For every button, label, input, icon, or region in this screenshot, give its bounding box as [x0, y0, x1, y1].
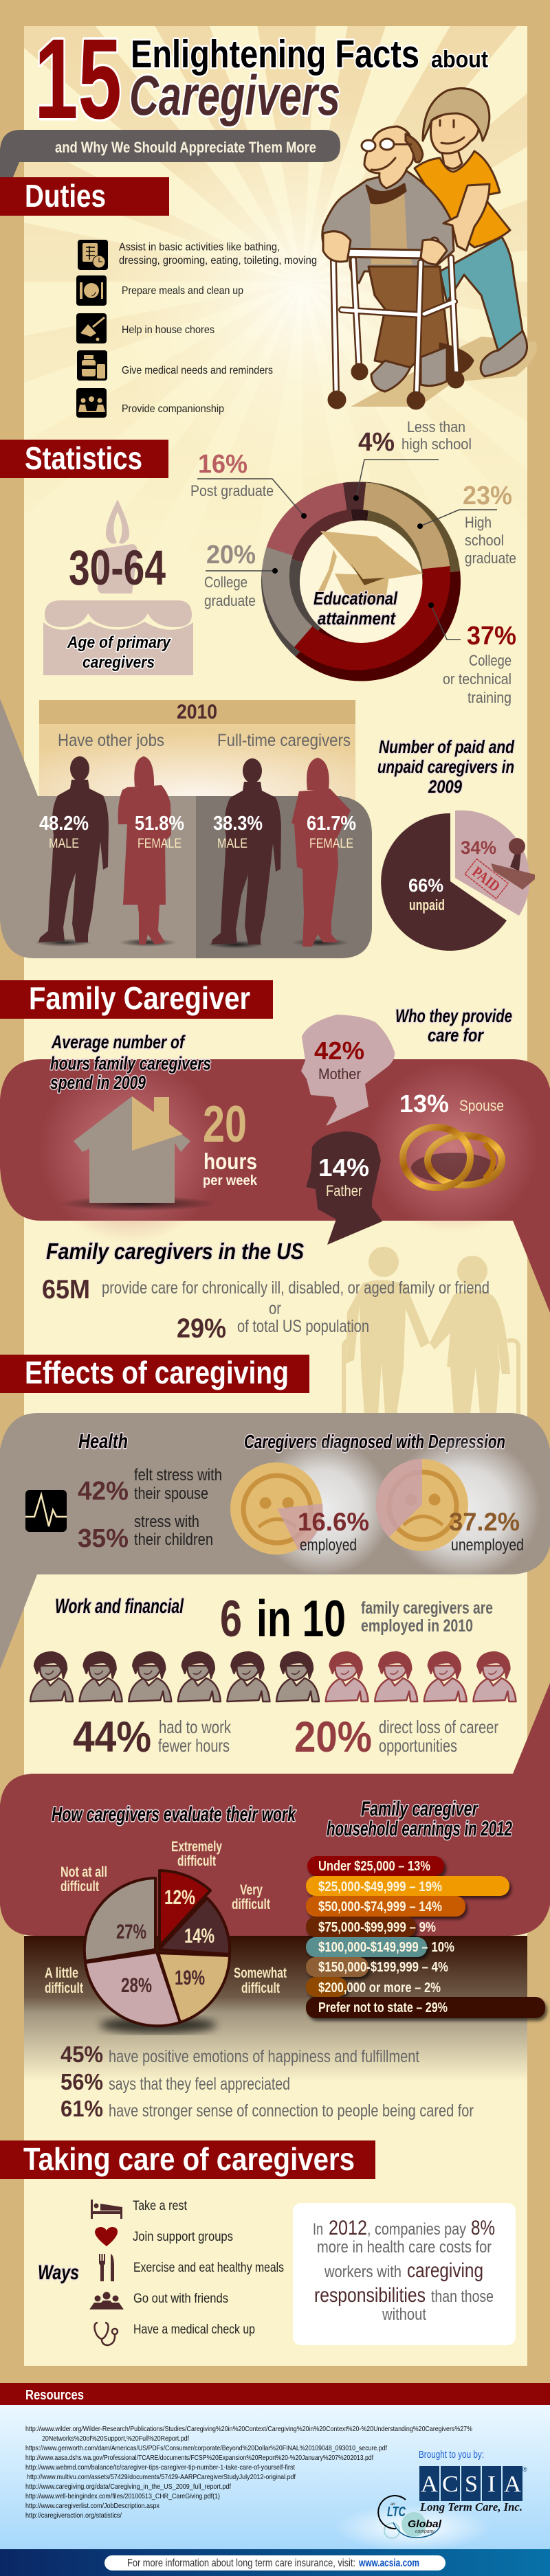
- callout: health care costs: In: [313, 2220, 323, 2239]
- pie category labels: difficult: [45, 1980, 83, 1996]
- panel: evaluation and earnings: [0, 1683, 550, 2033]
- icon: paid stamp: [465, 838, 535, 899]
- stat: employed: [298, 1508, 369, 1555]
- pie values: 27%: [116, 1921, 146, 1943]
- pie category labels: [45, 1839, 287, 1996]
- stat: 45 percent: have positive emotions of happiness and fulfillment: [109, 2047, 419, 2066]
- stat: career loss: 20%: [294, 1713, 372, 1761]
- heading: who they provide care for: care for: [428, 1025, 484, 1046]
- stat: unemployed: 37.2%: [449, 1508, 520, 1536]
- stat: 6 in 10: 6: [220, 1590, 242, 1647]
- pie category labels: Not at all: [60, 1864, 107, 1880]
- duty text two: Prepare meals and clean up: [122, 285, 243, 297]
- chart: how caregivers evaluate pie: [85, 1871, 230, 2033]
- cake caption: [67, 633, 171, 672]
- duty text four: Give medical needs and reminders: [122, 365, 273, 376]
- icon: paid stamp: PAID: [469, 863, 503, 895]
- heading: household earnings: [327, 1798, 512, 1840]
- chart: household earnings bars: $200,000 or more – 2%: [318, 1980, 441, 1996]
- pie category labels: difficult: [232, 1897, 270, 1912]
- stat: 65 million: [42, 1275, 490, 1304]
- label 37 percent: College: [469, 652, 512, 669]
- logo: acsia: I: [487, 2472, 496, 2497]
- stat: fewer hours: [73, 1713, 232, 1761]
- illustration: caregiver helping elderly man with walker: [322, 89, 537, 409]
- logo: acsia: A: [504, 2472, 521, 2497]
- source links: http://www.well-beingindex.com/files/20100513_CHR_CareGiving.pdf(1): [25, 2492, 220, 2500]
- chart: educational attainment donut: [243, 462, 474, 695]
- title: [34, 16, 488, 143]
- source links: [25, 2425, 472, 2520]
- panel: paid and unpaid caregivers: [377, 736, 535, 951]
- stat: unemployed: unemployed: [451, 1536, 524, 1555]
- label 23 percent: graduate: [465, 550, 516, 567]
- stat: stress with children: [78, 1513, 213, 1553]
- label 37 percent: 37%: [467, 622, 516, 651]
- title caregivers: Caregivers: [129, 65, 340, 127]
- logo: acsia: C: [442, 2472, 459, 2497]
- silhouette: father: 14%: [318, 1153, 369, 1182]
- heading: resources: [0, 2383, 550, 2405]
- logo: acsia: ®: [522, 2466, 527, 2473]
- label 4 percent: Less than: [407, 418, 465, 436]
- chart: household earnings bars: $75,000-$99,999 – 9%: [318, 1920, 436, 1935]
- source links: http://www.caregiving.org/data/Caregiving_in_the_US_2009_full_report.pdf: [25, 2483, 231, 2491]
- logo: ltc global: an: [390, 2502, 395, 2507]
- logo: acsia: Long Term Care, Inc.: [419, 2500, 522, 2513]
- panel heading: hours: Average number of: [51, 1032, 186, 1052]
- label 16 percent: [190, 450, 274, 499]
- stat: 56 percent: says that they feel appreciated: [109, 2075, 290, 2094]
- callout: health care costs: than those: [431, 2287, 494, 2306]
- gradient backdrop: [24, 1936, 527, 2081]
- label 23 percent: 23%: [463, 482, 512, 510]
- heading: effects of caregiving: Effects of caregiving: [25, 1355, 289, 1390]
- callout: health care costs: caregiving: [407, 2259, 483, 2282]
- icon: medicine: [77, 350, 107, 381]
- logo: ltc global: LTC: [387, 2505, 406, 2520]
- stat: 45 percent: 45%: [60, 2042, 103, 2067]
- way text: friends: Go out with friends: [133, 2292, 228, 2306]
- column headings: Have other jobs: [58, 731, 164, 750]
- donut title: attainment: [318, 608, 396, 629]
- silhouette: mother: 42%: [314, 1037, 364, 1065]
- panel heading: unpaid caregivers in: [377, 756, 514, 777]
- heading: duties: [0, 177, 169, 216]
- gender labels: FEMALE: [138, 837, 182, 851]
- label 37 percent: [443, 622, 516, 706]
- subtitle banner: and Why We Should Appreciate Them More: [55, 139, 316, 156]
- logo: ltc global: [378, 2496, 442, 2538]
- panel heading: hours: spend in 2009: [50, 1072, 146, 1093]
- panel: work and financial: [30, 1590, 516, 1761]
- heading: work and financial: Work and financial: [55, 1595, 184, 1618]
- panel heading: hours: hours family caregivers: [50, 1053, 211, 1074]
- label 16 percent: 16%: [198, 450, 248, 479]
- label 16 percent: Post graduate: [190, 482, 274, 499]
- label 4 percent: 4%: [358, 428, 395, 457]
- heading: statistics: Statistics: [25, 440, 142, 476]
- panel: family caregivers in the us: [42, 1239, 490, 1344]
- gender labels: MALE: [217, 837, 248, 851]
- duty text one: [119, 242, 317, 267]
- stat: career loss: direct loss of career: [379, 1717, 498, 1737]
- way text: support: Join support groups: [133, 2230, 233, 2244]
- icon: bed: [91, 2200, 122, 2219]
- chart: household earnings bars: $25,000-$49,999 – 19%: [318, 1879, 442, 1895]
- callout: health care costs: without: [382, 2305, 426, 2324]
- stat: 29 percent: 29%: [177, 1313, 226, 1344]
- logo: acsia: [419, 2466, 527, 2513]
- panel: ways to cope: [38, 2199, 284, 2345]
- icon: broom: [76, 313, 107, 343]
- pie category labels: Very: [240, 1882, 263, 1898]
- source links: 20Networks%20of%20Support,%20Full%20Report.pdf: [42, 2434, 189, 2443]
- chart: household earnings bars: [306, 1856, 545, 2018]
- label 20 percent: 20%: [206, 541, 256, 569]
- logo: ltc global: Global: [408, 2518, 442, 2530]
- stat: 6 in 10: in 10: [256, 1590, 346, 1647]
- label 4 percent: high school: [402, 436, 472, 453]
- cake caption: Age of primary: [67, 633, 171, 652]
- heading: resources: Resources: [25, 2388, 84, 2403]
- panel: health and depression: [0, 1413, 550, 1669]
- source links: http://www.wilder.org/Wilder-Research/Publications/Studies/Caregiving%20in%20Context/Caregiving%20in%20Context%20-%20Understanding%20Caregivers%27%: [25, 2425, 472, 2433]
- stat: 56 percent: [60, 2069, 290, 2094]
- stat: stress with spouse: [78, 1466, 222, 1506]
- panel: age of primary caregivers cake: [43, 499, 193, 675]
- label 20 percent: graduate: [204, 592, 256, 609]
- age range number: 30-64: [69, 541, 166, 596]
- label 23 percent: [463, 482, 516, 567]
- donut labels: [190, 418, 516, 706]
- icon: stethoscope: [95, 2323, 118, 2345]
- column headings: Full-time caregivers: [217, 731, 351, 750]
- pie values: [116, 1886, 214, 1997]
- heading: evaluate work: How caregivers evaluate their work: [52, 1803, 296, 1826]
- pie values: 12%: [164, 1886, 195, 1909]
- panel: family caregiver hours and recipients: [0, 1006, 550, 1313]
- source links: http://www.aasa.dshs.wa.gov/Professional/TCARE/documents/FCSP%20Expansion%20Report%20-%20January%207%202013.pdf: [25, 2454, 373, 2462]
- heading: duties: Duties: [25, 178, 106, 214]
- donut leader lines: [197, 460, 497, 640]
- stat: stress with children: their children: [134, 1530, 213, 1549]
- heading: who they provide care for: [395, 1006, 512, 1046]
- pie values: 19%: [175, 1967, 205, 1989]
- label 37 percent: or technical: [443, 670, 512, 688]
- logo: acsia: A: [421, 2472, 438, 2497]
- stat: hours per week: hours: [204, 1149, 257, 1174]
- stat: 29 percent: of total US population: [237, 1317, 369, 1336]
- text: employed caregivers: [361, 1598, 493, 1636]
- panel heading: Number of paid and: [379, 736, 515, 757]
- stat: spouse: [399, 1089, 504, 1118]
- stat: hours per week: 20: [203, 1095, 247, 1153]
- heading: health: Health: [78, 1430, 128, 1453]
- stat: career loss: opportunities: [379, 1735, 457, 1756]
- silhouette: female full-time: [292, 758, 351, 947]
- label 37 percent: training: [468, 689, 512, 706]
- footer bar: [0, 2549, 550, 2576]
- icon: fork and knife: [99, 2254, 114, 2281]
- pie category labels: Extremely: [171, 1839, 222, 1855]
- icon: heart monitor: [25, 1490, 67, 1532]
- percentages: 61.7%: [307, 813, 356, 835]
- gender labels: FEMALE: [309, 837, 353, 851]
- stat: 56 percent: 56%: [60, 2069, 103, 2094]
- icon: house: [58, 1096, 217, 1211]
- chart: household earnings bars: $100,000-$149,999 – 10%: [318, 1940, 454, 1955]
- title about: about: [431, 47, 488, 73]
- logo: acsia: S: [465, 2472, 478, 2497]
- pie labels: 66%: [408, 875, 443, 896]
- year heading: 2010: [177, 701, 217, 723]
- silhouette: father: Father: [326, 1182, 362, 1199]
- way text: checkup: Have a medical check up: [133, 2323, 255, 2337]
- source links: https://www.genworth.com/dam/Americas/US/PDFs/Consumer/corporate/Beyond%20Dollar%20FINAL%20109048_093010_secure.pdf: [25, 2444, 387, 2452]
- stat: employed: 16.6%: [298, 1508, 369, 1536]
- stat: career loss: [294, 1713, 498, 1761]
- text: brought to you by: Brought to you by:: [419, 2449, 484, 2461]
- icon: graduation cap: [318, 531, 423, 605]
- stat: fewer hours: 44%: [73, 1713, 151, 1761]
- heading: who they provide care for: Who they provide: [395, 1006, 512, 1026]
- stat: hours per week: per week: [203, 1173, 258, 1188]
- panel: duties list: [76, 240, 317, 418]
- column headings: [58, 731, 351, 750]
- stat: 65 million: 65M: [42, 1275, 90, 1304]
- panel: resources list: [0, 2405, 550, 2551]
- icon: companions: [76, 388, 107, 418]
- panel heading: hours: [50, 1032, 211, 1093]
- source links: http://www.multivu.com/assets/57429/documents/57429-AARPCaregiverStudyJuly2012-original.pdf: [27, 2473, 296, 2481]
- connector: or: or: [269, 1299, 281, 1318]
- pie category labels: Somewhat: [234, 1965, 287, 1981]
- heading: taking care of caregivers: Taking care of caregivers: [23, 2141, 355, 2177]
- callout: health care costs: [293, 2203, 516, 2345]
- percentages: 38.3%: [213, 813, 263, 835]
- stat: spouse: 13%: [399, 1089, 449, 1118]
- label 20 percent: [204, 541, 256, 609]
- icon: friends: [89, 2292, 124, 2309]
- silhouette: mother: Mother: [318, 1065, 361, 1083]
- way text: exercise: Exercise and eat healthy meals: [133, 2261, 284, 2275]
- logo: ltc global: company: [415, 2529, 434, 2534]
- stat: stress with spouse: their spouse: [134, 1484, 208, 1503]
- text: employed caregivers: family caregivers are: [361, 1598, 493, 1618]
- silhouette: father: [306, 1131, 382, 1245]
- pie category labels: difficult: [241, 1980, 280, 1996]
- gender labels: MALE: [49, 837, 79, 851]
- chart: household earnings bars: Prefer not to state – 29%: [318, 2000, 448, 2015]
- label 23 percent: High: [465, 514, 492, 531]
- panel heading: [377, 736, 515, 797]
- donut leader dots: [272, 495, 434, 608]
- panel: 2010 gender breakdown: [0, 699, 372, 958]
- section subheading: Family caregivers in the US: [46, 1239, 304, 1264]
- footer bar: www.acsia.com: [358, 2557, 419, 2569]
- icon: meal: [76, 275, 107, 306]
- pie labels: 34%: [461, 837, 496, 858]
- stat: employed: employed: [300, 1536, 357, 1555]
- chart: household earnings bars: Under $25,000 – 13%: [318, 1859, 430, 1874]
- stat: fewer hours: had to work: [159, 1717, 232, 1737]
- icon: heart: [95, 2227, 118, 2246]
- stat: 29 percent: [177, 1313, 369, 1344]
- pie category labels: A little: [45, 1965, 78, 1981]
- pie values: 28%: [121, 1974, 152, 1997]
- stat: stress with children: 35%: [78, 1524, 129, 1553]
- callout: health care costs: 8%: [471, 2217, 495, 2239]
- silhouette: elderly couple: [344, 1247, 518, 1414]
- label 23 percent: school: [465, 532, 504, 549]
- source links: http://caregiveraction.org/statistics/: [25, 2511, 122, 2520]
- silhouette: mother: [301, 1015, 395, 1126]
- stat: spouse: Spouse: [459, 1097, 504, 1114]
- heading: family caregiver: Family Caregiver: [29, 980, 250, 1016]
- text: employed caregivers: employed in 2010: [361, 1616, 473, 1636]
- icon: schedule: [78, 240, 108, 270]
- sunburst rays: [24, 26, 527, 420]
- label 20 percent: College: [204, 574, 248, 591]
- callout: health care costs: more in health care costs for: [317, 2238, 492, 2257]
- silhouette: male full-time: [211, 758, 281, 945]
- pie chart: [381, 811, 529, 951]
- stat: 6 in 10: [220, 1590, 346, 1647]
- stat: 61 percent: [60, 2096, 474, 2121]
- stat: fewer hours: fewer hours: [158, 1735, 230, 1756]
- duty text one: Assist in basic activities like bathing,: [119, 242, 280, 253]
- callout: health care costs: workers with: [324, 2263, 402, 2281]
- donut title: Educational: [314, 588, 398, 609]
- percentages: [39, 813, 356, 835]
- icon: cake: [43, 499, 193, 675]
- silhouette: female with other jobs: [118, 756, 171, 945]
- chart: unemployed sad face: [376, 1459, 468, 1551]
- way text: rest: Take a rest: [133, 2199, 188, 2213]
- chart: household earnings bars: $50,000-$74,999 – 14%: [318, 1899, 442, 1914]
- pie category labels: difficult: [60, 1879, 99, 1895]
- icon: wedding rings: [403, 1127, 502, 1188]
- callout: health care costs: , companies pay: [367, 2220, 466, 2239]
- source links: http://www.caregiverlist.com/JobDescription.aspx: [25, 2502, 160, 2510]
- duty text five: Provide companionship: [122, 403, 224, 415]
- heading: household earnings: Family caregiver: [361, 1798, 479, 1820]
- gender labels: [49, 837, 353, 851]
- callout: health care costs: responsibilities: [314, 2284, 426, 2307]
- footer bar: For more information about long term care insurance, visit:: [127, 2557, 355, 2569]
- pie labels: [408, 837, 496, 914]
- stat: stress with children: stress with: [134, 1513, 199, 1531]
- cake caption: caregivers: [82, 653, 155, 672]
- stat: 61 percent: 61%: [60, 2096, 103, 2121]
- subtitle banner: [0, 130, 340, 179]
- heading: ways: Ways: [38, 2261, 79, 2284]
- stat: hours per week: [203, 1095, 258, 1188]
- title number 15: 15: [34, 16, 122, 143]
- chart: employed sad face: [230, 1462, 323, 1555]
- title line one: Enlightening Facts: [131, 32, 419, 76]
- panel: positive feelings stats: [60, 2042, 474, 2121]
- stat: stress with spouse: 42%: [78, 1477, 129, 1506]
- percentages: 51.8%: [135, 813, 184, 835]
- duty text three: Help in house chores: [122, 324, 214, 336]
- pie category labels: difficult: [177, 1853, 216, 1869]
- panel heading: 2009: [428, 776, 462, 797]
- duty text one: dressing, grooming, eating, toileting, moving: [119, 255, 317, 267]
- chart: household earnings bars: $150,000-$199,999 – 4%: [318, 1960, 448, 1975]
- percentages: 48.2%: [39, 813, 89, 835]
- pictogram: 6 of 10 caregivers: [30, 1652, 516, 1702]
- silhouette: male with other jobs: [38, 756, 109, 942]
- donut title: [314, 588, 398, 629]
- stat: unemployed: [449, 1508, 524, 1555]
- stat: stress with spouse: felt stress with: [134, 1466, 222, 1484]
- pie labels: unpaid: [409, 896, 445, 914]
- source links: http://www.webmd.com/balance/tc/caregiver-tips-caregiver-tip-number-1-take-care-of-yourself-first: [25, 2463, 295, 2472]
- stat: 45 percent: [60, 2042, 419, 2067]
- label 4 percent: [358, 418, 472, 457]
- callout: health care costs: 2012: [329, 2217, 367, 2239]
- pie values: 14%: [184, 1925, 214, 1947]
